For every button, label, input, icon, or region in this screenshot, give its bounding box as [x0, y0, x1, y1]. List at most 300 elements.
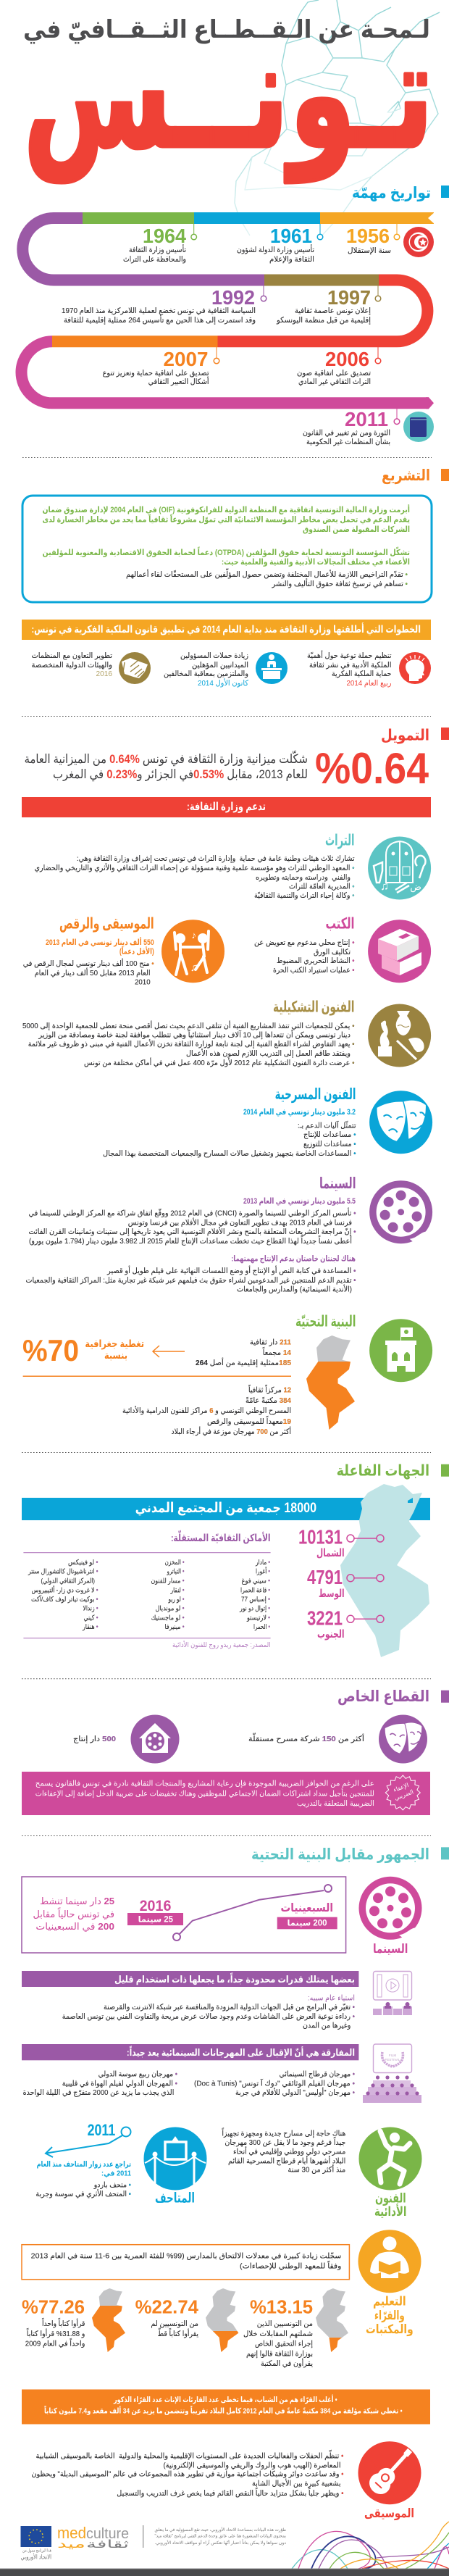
stat: read a book: واحداً في العام 2009	[25, 2338, 85, 2348]
label: المتاحف	[155, 2191, 195, 2206]
icon: festival laurel and audience	[363, 2044, 421, 2103]
region count: north: 10131	[298, 1526, 343, 1548]
icon: books	[368, 920, 431, 983]
region count: south: الجنوب	[317, 1628, 345, 1641]
venues column 1	[239, 1559, 270, 1631]
icon: heritage: ض	[410, 881, 421, 893]
timeline event 2006: 2006	[325, 348, 369, 370]
coverage label	[85, 1338, 144, 1361]
icon: museum frame and ropes	[143, 2127, 207, 2190]
venues column 2: • المخزن	[165, 1559, 184, 1567]
panel: infrastructure	[22, 1314, 432, 1436]
panel: heritage	[35, 833, 431, 900]
timeline event 1956: سنة الإستقلال	[348, 246, 391, 255]
timeline event 2007: 2007	[164, 348, 209, 370]
icon: guitar	[358, 2441, 421, 2504]
map of Tunisia: coverage	[306, 1335, 355, 1430]
committees list: • المساعدة في كتابة النص أو الإنتاج أو وضع اللمسات النهائية على فيلم طويل أو قصير	[106, 1265, 356, 1275]
timeline event 1997: إقليمية من قبل منظمة اليونسكو	[276, 316, 371, 325]
label: الفنون	[375, 2191, 406, 2206]
footer	[0, 2522, 449, 2576]
stat: read a book: قرأوا كتاباً واحداً	[42, 2318, 85, 2328]
heading: البنية التحتيّة	[295, 1314, 356, 1330]
venues column 1: • الحمرا	[253, 1623, 270, 1631]
committees list	[26, 1265, 356, 1294]
theatre need text: مسرحي دولي ووطني وإقليمي في أنحاء	[233, 2146, 345, 2156]
EU funding note: الاتحاد الأوروبي	[20, 2554, 51, 2561]
music text: العام 2013 مقابل 50 ألف دينار في العام	[35, 967, 151, 978]
enrolment box	[22, 2245, 349, 2280]
label: والمكتبات	[366, 2322, 414, 2337]
step: field officers: الميدانيين المؤهلين	[192, 661, 248, 670]
theatre need text: البلاد أشهرها أيام قرطاج المسرحية القائم	[228, 2155, 345, 2165]
banner	[22, 1971, 358, 1987]
timeline event 1964	[123, 224, 197, 264]
panel: museums	[35, 2121, 207, 2206]
OIF agreement text: أبرمت وزارة المالية التونسية اتفاقية مع المنظمة الدولية للفرانكوفونية (OIF) في العام 2004 لإدارة صندوق ضمان	[42, 504, 410, 514]
theatre text: • المساعدات الخاصة بتجهيز وتشغيل صالات المسارح والجمعيات المتخصصة بهذا المجال	[103, 1149, 356, 1158]
tax exemption badge: الضريبي	[393, 1788, 414, 1801]
amount: 3.2 مليون دينار تونسي في العام 2014	[243, 1108, 356, 1117]
venues column 2: • مينيرفا	[165, 1623, 184, 1631]
cinema text	[29, 1208, 356, 1246]
enrolment box: سجّلت زيادة كبيرة في معدلات الالتحاق بالمدارس (99% للفئة العمرية بين 6-11 سنة في العام 2013	[31, 2252, 341, 2261]
venues column 1: • أغورا	[256, 1567, 270, 1576]
visitors drop stat	[46, 2121, 130, 2157]
med culture logo: ميد	[57, 2538, 85, 2551]
venues column 3: • زندالا	[83, 1605, 98, 1613]
venues column 2: • لو ماجستيك	[151, 1614, 185, 1622]
icon: Tunisian flag	[403, 227, 434, 257]
visual arts text: دينار تونسي ويمكن أن تتعداها إلى 10 آلاف دينار استثنائياً وهي تتطلب موافقة لجنة خاصة ومصادقة من الوزير	[38, 1029, 351, 1040]
stat: library readers: بوزارة الثقافة قالوا إنهم	[246, 2350, 313, 2359]
timeline event 1992: السياسة الثقافية في تونس تخضع لعملية اللامركزية منذ العام 1970	[62, 307, 256, 315]
stat: never read	[135, 2288, 238, 2352]
heading: الموسيقى والرقص	[59, 916, 154, 933]
step: awareness campaign: تنظيم حملة توعية حول أهميّة	[307, 650, 392, 660]
music text: 2010	[135, 978, 151, 987]
disclaimer: بمحتوى البيانات المنشورة هنا على عاتق وحدة الدعم الفني لبرنامج "ثقافة ميد"	[155, 2534, 286, 2539]
banner: readers and libraries: • أغلب القرّاء هم من الشباب، فيما تخطى عدد القارئات الإناث عدد القرّاء الذكور	[113, 2394, 337, 2404]
tax text: على الرغم من الحوافز الضريبية الموجودة فإن رعاية المشاريع والمنتجات الثقافية نادرة في تونس فالقانون يسمح	[35, 1779, 374, 1788]
bottom bar	[0, 2569, 449, 2576]
coverage label: تغطية جغرافية	[85, 1338, 144, 1350]
background map outline of Tunisia	[235, 0, 440, 239]
infrastructure counts north: 185ممثلية إقليمية من أصل 264	[196, 1357, 291, 1367]
timeline event 1961	[237, 224, 323, 264]
theatre need text	[222, 2127, 345, 2175]
timeline event 2006: تصديق على اتفاقية صون	[297, 369, 371, 378]
music scene text: المعاصرة (الهيب هوب والروك والريفي والموسيقى الإلكترونية)	[164, 2461, 340, 2469]
timeline event 1964: والمحافظة على التراث	[123, 255, 186, 264]
heading: private sector: القطاع الخاص	[337, 1688, 429, 1705]
music funding amount	[46, 937, 154, 956]
step: awareness campaign: حماية الملكية الفكرية	[332, 670, 391, 678]
panel: film festivals	[22, 2044, 421, 2103]
venues column 3: • كيني	[84, 1614, 98, 1622]
coverage label: بنسبة	[104, 1349, 127, 1361]
music scene text: بشعبية كبيرة بين الأجيال الشابة	[252, 2479, 340, 2488]
visitors text: تراجع عدد زوار المتاحف منذ العام	[37, 2160, 131, 2169]
festival list right	[194, 2070, 355, 2097]
venues column 1: • إسباس 77	[241, 1596, 270, 1604]
enrolment box: وفقاً للمعهد الوطني للإحصاءات)	[240, 2260, 341, 2271]
stat: library readers: يقرأون في المكتبة	[261, 2358, 313, 2368]
icon: heritage: ♫	[380, 880, 389, 893]
heritage text: • المعهد الوطني للتراث وهو مؤسسة علمية وفنية مسؤولة عن إحصاء التراث الثقافي والأثري والتاريخي والحضاري	[35, 863, 355, 872]
timeline event 1956: 1956	[346, 225, 390, 247]
stat: read a book	[22, 2288, 125, 2352]
visual arts text: • عرضت دائرة الفنون التشكيلية عام 2012 لأول مرّة 400 عمل فني في أماكن مختلفة من تونس	[84, 1057, 355, 1067]
heading: الأماكن الثقافيّة المستقلّة:	[171, 1530, 271, 1544]
music scene text: • تنظّم الحفلات والفعاليات الجديدة على المستويات الإقليمية والمحلية والدولية الخاصة بالموسيقى الشبابية	[36, 2450, 344, 2460]
timeline event 1992: 1992	[211, 286, 255, 309]
OTPDA bullets: • تساهم في ترسيخ ثقافة حقوق التأليف والنشر	[272, 578, 408, 588]
step: field officers	[164, 651, 288, 688]
banner	[22, 2044, 358, 2060]
med culture logo	[57, 2524, 129, 2551]
OTPDA text: الأعضاء في مختلف المجالات الأدبية والفنية والعلمية حيث:	[222, 557, 410, 567]
funding comparison text	[25, 750, 308, 782]
region count: north: الشمال	[316, 1547, 345, 1559]
med culture logo: med	[57, 2524, 86, 2542]
discontent text: استياء عام سببه:	[308, 1994, 355, 2003]
causes list: • تغيّر في البرامج من قبل الجهات الدولية المزودة والمنافسة عبر شبكة الانترنت والقرصنة	[104, 2003, 355, 2012]
data point seventies	[277, 1902, 337, 1929]
step: awareness campaign: الملكية الأدبية في نشر ثقافة	[309, 660, 391, 670]
timeline event 1992	[62, 285, 267, 325]
timeline event 1992: وقد استمرت إلى هذا الحين مع تأسيس 264 ممثلية إقليمية للثقافة	[64, 314, 256, 325]
label: الموسيقى	[364, 2506, 414, 2521]
venues column 3: • لا غروت دي زار- ألتيبيروس	[32, 1585, 98, 1594]
venues column 3: • هنقار	[82, 1623, 98, 1631]
panel: music and dance	[23, 916, 224, 987]
icon: dancers: ♪	[191, 930, 196, 941]
icon: law book	[403, 412, 434, 442]
colourful swirl	[292, 2522, 449, 2569]
OTPDA text: تشكّل المؤسسة التونسية لحماية حقوق المؤلفين (OTPDA) دعماً لحماية الحقوق الاقتصادية والمعنوية للمؤلفين	[42, 546, 410, 557]
OTPDA text	[42, 546, 410, 567]
icon: cultural building	[369, 1319, 432, 1382]
infrastructure counts all	[122, 1384, 291, 1436]
heritage text: تشارك ثلاث هيئات وطنية عامة في حماية وإدارة التراث في تونس تحت إشراف وزارة الثقافة وهي:	[77, 854, 355, 863]
icon: cinema reel with label: السينما	[373, 1942, 408, 1956]
venues column 3	[28, 1559, 98, 1631]
heading: التراث	[325, 833, 355, 849]
EU funding note: هذا البرنامج ممول من	[22, 2548, 51, 2554]
cinema text: فرنسا في العام 2013 بهدف تطوير التعاون في مجال الأفلام بين فرنسا وتونس	[128, 1218, 352, 1227]
banner: civil society associations	[22, 1498, 430, 1520]
visual arts text: ويفتقد طاقم العمل إلى التدريب اللازم لصون هذه الأعمال	[186, 1049, 351, 1058]
label: الأدائية	[374, 2204, 407, 2219]
cinema text: أعطى نفساً جديداً لهذا القطاع حيث تخطت مساعدات الإنتاج للعام 2015 الـ 3.982 مليون دينار (1.794 مليون يورو)	[29, 1235, 352, 1246]
stat: library readers	[243, 2288, 348, 2368]
region count: centre: الوسط	[319, 1588, 345, 1600]
icon: cinema reel with label	[359, 1877, 421, 1956]
OTPDA bullets: • تقدّم التراخيص اللازمة للأعمال المختلفة وتضمن حصول المؤلّفين على المستحقّات لقاء أعمالهم	[126, 569, 408, 579]
timeline road	[22, 212, 435, 409]
funding comparison text: للعام 2013، مقابل %0.53في الجزائر و%0.23 في المغرب	[53, 767, 308, 782]
stat: library readers: من التونسيين الذين	[257, 2319, 313, 2328]
banner: intellectual property steps	[22, 620, 431, 640]
icon: screen and seats	[373, 1971, 412, 2015]
OTPDA bullets	[126, 569, 408, 588]
stat: never read: يقرأوا كتاباً قطّ	[158, 2328, 198, 2338]
venues column 2: • لو مونديال	[155, 1605, 184, 1613]
cinema text: • تأسس المركز الوطني للسينما والصورة (CNCI) في العام 2012 ووقّع اتفاق شراكة مع المركز الوطني للسينما في	[29, 1208, 356, 1218]
heading: الفنون التشكيلية	[273, 999, 355, 1016]
visual arts text: • يعهد التفاوض لشراء القطع الفنية إلى لجنة تابعة لوزارة الثقافة تخزن الأعمال الفنية في مبنى ذو ظروف غير ملائمة	[28, 1039, 355, 1049]
map: associations by region	[298, 1484, 429, 1657]
timeline event 2011: بشأن المنظمات غير الحكومية	[306, 436, 390, 446]
region count: centre	[307, 1566, 384, 1600]
timeline event 1964: تأسيس وزارة الثقافة	[129, 244, 186, 254]
theatre text: • مساعدات للتوزيع	[303, 1140, 356, 1149]
data point 2016: 2016	[140, 1898, 171, 1914]
infrastructure counts all: أكثر من 700 مهرجان موزعة في أرجاء البلاد	[171, 1426, 291, 1436]
venues column 2: • لو ريو	[168, 1596, 185, 1604]
banner: readers and libraries: • تغطي شبكة مؤلفة من 384 مكتبةً عامةً في العام 2012 كامل البلاد تقريباً وتتضمن ما يزيد عن 34 ألف مقعد و7.4 مليون كتاباً	[44, 2405, 403, 2416]
icon: theatre masks	[369, 1091, 432, 1154]
disclaimer	[155, 2527, 286, 2546]
museums list: • متحف باردو	[93, 2180, 131, 2189]
heading: important dates: تواريخ مهمّة	[352, 185, 431, 201]
data point seventies: 200 سينما	[287, 1920, 327, 1928]
funding comparison text: شكّلت ميزانية وزارة الثقافة في تونس %0.64 من الميزانية العامة	[25, 750, 308, 767]
cinema decline text	[33, 1896, 114, 1932]
panel: performing arts funding	[103, 1086, 432, 1158]
banner: المفارقة هي أنّ الإقبال على المهرجانات السينمائية يعد جيداً:	[127, 2046, 355, 2058]
causes list	[62, 2003, 355, 2030]
heading: funding: التمويل	[381, 728, 429, 744]
heading: السينما	[319, 1175, 356, 1192]
panel: independent cultural venues	[23, 1530, 271, 1649]
festival list right: • مهرجان قرطاج السينمائي	[280, 2070, 355, 2079]
venues column 2: • لنقار	[170, 1586, 184, 1594]
festival list right: • مهرجان الفيلم الوثائقي "دوك آ تونس" (Doc à Tunis)	[194, 2078, 355, 2088]
med culture logo: ثقافة	[86, 2538, 129, 2551]
label	[374, 2191, 407, 2219]
banner: ministry supports: تدعم وزارة الثقافة:	[187, 801, 266, 813]
OIF agreement text: الشركات المقبولة ضمن الصندوق	[303, 525, 410, 534]
icon: festival laurel and audience: FILM	[389, 2054, 396, 2057]
heritage text: • وكالة إحياء التراث والتنمية الثقافيّة	[254, 891, 355, 900]
heritage text: • المديرية العامّة للتراث	[289, 883, 355, 891]
visitors drop stat: 2011	[88, 2121, 115, 2139]
theatre need text: هناك حاجة إلى مسارح جديدة ومجهزة تجهيزاً	[222, 2127, 345, 2138]
heading: actors: الجهات الفاعلة	[337, 1463, 429, 1480]
icon: festival laurel and audience: FESTIVAL	[385, 2058, 400, 2062]
panel: legislation box	[22, 496, 432, 602]
theatre need text: منذ أكثر من 30 سنة	[288, 2164, 345, 2175]
books text: • النشاط التحريري المضبوط	[277, 956, 355, 965]
venues column 3: (المركز الثقافي الدولي)	[41, 1577, 95, 1585]
data point 2016	[127, 1898, 183, 1925]
banner: civil society associations: 18000 جمعية من المجتمع المدني	[135, 1501, 316, 1516]
big stat: 0.64 percent: %0.64	[315, 744, 429, 793]
step: awareness campaign	[307, 650, 431, 688]
venues column 1: • قاعة الحمرا	[240, 1586, 270, 1594]
cinema text: • إنّ مراجعة التشريعات المتعلقة بالمنح ونشر الأفلام التونسية التي يعود تاريخها إلى ستينات وثمانينات القرن الفائت	[29, 1227, 356, 1236]
icon: dancer	[359, 2127, 421, 2190]
panel: limited capacity	[22, 1971, 412, 2030]
music text	[23, 958, 154, 987]
venues column 1: • لارتيستو	[246, 1614, 270, 1622]
icon: film reel	[369, 1180, 432, 1243]
music scene text	[31, 2450, 344, 2498]
museums list: • المتحف الأثري في سوسة وجربة	[35, 2189, 131, 2198]
venues column 3: • بوكيت تياتر لوف كاف/آكت	[31, 1594, 98, 1604]
panel: music	[31, 2441, 421, 2521]
timeline event 1997: إعلان تونس عاصمة ثقافية	[295, 307, 371, 315]
stat: library readers: %13.15	[250, 2296, 313, 2318]
timeline event 2007	[103, 347, 219, 386]
timeline event 2007: تصديق على اتفاقية حماية وتعزيز تنوع	[103, 369, 209, 378]
timeline event 2011	[303, 408, 400, 446]
timeline event 2007: أشكال التعبير الثقافي	[148, 376, 209, 386]
amount: 5.5 مليون دينار تونسي في العام 2013	[243, 1197, 356, 1206]
panel: books	[254, 916, 431, 983]
private sector: production houses: 500 دار إنتاج	[73, 1735, 116, 1743]
label: والقرّاء	[374, 2309, 405, 2323]
stat: library readers: شملتهم المقابلات خلال	[243, 2330, 313, 2338]
icon: reader	[358, 2230, 421, 2293]
venues column 3: • لو فينيكس	[68, 1559, 98, 1567]
step: field officers: والملتزمين بمعاقبة المخالفين	[164, 670, 248, 678]
icon: vase statue palette	[368, 1004, 431, 1067]
private sector: production houses	[73, 1714, 180, 1764]
causes list: • رداءة نوعية العرض على الشاشات وعدم وجود صالات عرض مريحة والتفاوت الفني بين تونس العاصمة	[62, 2012, 355, 2021]
festival list left	[23, 2070, 177, 2097]
banner: ministry supports	[22, 797, 431, 817]
timeline event 1961: تأسيس وزارة الدولة لشؤون	[237, 244, 314, 254]
OIF agreement text	[42, 504, 410, 534]
books text: • إنتاج محلي مدعوم مع تعويض عن	[254, 938, 355, 947]
timeline event 2006: التراث الثقافي غير المادي	[298, 378, 371, 386]
cinema decline text: 25 دار سينما تنشط	[40, 1896, 114, 1907]
panel: visual arts	[22, 999, 431, 1067]
festival list right: • مهرجان "أوليس" الدولي للأفلام في جربة	[235, 2087, 355, 2097]
heading: legislation: التشريع	[382, 467, 430, 484]
stat: read a book: %77.26	[22, 2296, 85, 2318]
stat: read a book: و 31.88% قرأوا كتاباً	[27, 2328, 85, 2338]
music scene text: • ويظهر جلياً بشكل متزايد حالياً النقص القائم فيما يخص غرف التدريب والتسجيل	[117, 2488, 344, 2498]
timeline event 1961: الثقافة والإعلام	[269, 255, 314, 264]
region count: north	[298, 1526, 384, 1559]
infrastructure counts north: 211 دار ثقافية	[250, 1338, 291, 1347]
visual arts text: • يمكن للجمعيات التي تنفذ المشاريع الفنية أن تتلقى الدعم بحيث تصل أقصى منحة تعطى للجمعية الواحدة إلى 5000	[22, 1020, 355, 1030]
heading: الكتب	[326, 916, 355, 933]
data point seventies: السبعينيات	[281, 1902, 333, 1914]
step: international cooperation: 2016	[96, 670, 112, 678]
cinema decline text: 200 في السبعينيات	[35, 1921, 114, 1932]
timeline event 1964: 1964	[143, 225, 186, 247]
step: field officers: كانون الأول 2014	[198, 678, 248, 688]
heritage text: والفني ودراسته وحمايته وتطويره	[256, 873, 351, 882]
venues column 2: • مسار للفنون	[151, 1577, 184, 1585]
music scene text: • وقد ساعدت دوائر وشبكات اجتماعية موازية في تطوير هذه المجموعات في عالم "الموسيقى البديلة" ويحظون	[31, 2470, 344, 2479]
visitors text	[37, 2160, 131, 2178]
data point 2016: 25 سينما	[138, 1916, 174, 1925]
timeline event 1997: 1997	[327, 286, 371, 309]
theatre text: • مساعدات للإنتاج	[303, 1130, 356, 1139]
books text	[254, 938, 355, 975]
med culture logo: culture	[86, 2526, 129, 2542]
icon: heritage	[368, 836, 431, 900]
cinema decline text: في تونس حالياً مقابل	[33, 1907, 114, 1920]
label	[366, 2295, 414, 2337]
timeline event 2011: 2011	[345, 408, 388, 430]
tax text: للمنتجين بتأجيل سداد اشتراكات الضمان الاجتماعي للموظفين وهناك تخفيضات على ضريبة الدخل إضافة إلى الإعفاءات	[35, 1788, 374, 1798]
private sector: theatre companies: أكثر من 150 شركة مسرح مستقلّة	[248, 1733, 364, 1743]
committees heading: هناك لجنتان خاصتان بدعم الإنتاج مهمتهما:	[232, 1255, 356, 1264]
timeline event 1961: 1961	[270, 225, 312, 247]
festival list left: الذي يجذب ما يزيد عن 2000 متفرّج في الليلة الواحدة	[23, 2088, 174, 2097]
venues column 1: • مادار	[255, 1559, 270, 1567]
panel: cinema decline chart	[22, 1877, 346, 1953]
stat: never read: من التونسيين لم	[151, 2319, 198, 2328]
infrastructure counts all: 12 مركزاً ثقافياً	[248, 1384, 291, 1395]
committees list: (الأندية السينمائية) والمدارس والجامعات	[237, 1285, 352, 1294]
timeline event 1956	[346, 224, 400, 255]
tax text	[35, 1779, 374, 1808]
label: التعليم	[373, 2295, 406, 2309]
banner: بعضها يمتلك قدرات محدودة جداً، ما يجعلها ذات استخدام قليل	[114, 1972, 355, 1985]
step: awareness campaign: ربيع العام 2014	[346, 679, 391, 688]
music funding amount: (الأقل دعماً)	[119, 945, 154, 956]
step: international cooperation: تطوير التعاون مع المنظمات	[32, 651, 112, 660]
panel: performing arts	[222, 2127, 421, 2219]
theatre text	[103, 1121, 356, 1158]
disclaimer: طوّرت هذه البيانات بمساعدة الاتحاد الأوروبي، حيث تقع المسؤولية في ما يتعلق	[155, 2527, 286, 2533]
venues column 3: • انترناشيونال كالتشورال سنتر	[28, 1568, 98, 1576]
causes list: وغيرها من المدن	[303, 2022, 351, 2030]
infrastructure counts north: 14 مجمعاً	[262, 1347, 291, 1357]
panel: education and reading	[22, 2230, 421, 2368]
venues column 1: • إتوال دو نور	[239, 1605, 270, 1613]
timeline event 1997	[276, 285, 381, 325]
timeline event 2011: الثورة ومن ثم تغيير في القانون	[303, 429, 390, 438]
region count: south: 3221	[307, 1607, 343, 1630]
heading: الفنون المسرحية	[275, 1086, 356, 1103]
step: international cooperation: والهيئات الدولية المتخصصة	[32, 661, 112, 670]
committees list: • تقديم الدعم للمنتجين غير المدعومين لشراء حقوق بث فيلمهم عبر شبكة غير تجارية مثل: المراكز الثقافية والجمعيات	[26, 1276, 356, 1285]
venues column 2	[151, 1559, 185, 1631]
museums list	[35, 2180, 131, 2198]
panel: cinema funding	[26, 1175, 432, 1294]
timeline event 2006	[297, 347, 381, 386]
music text: • منح 100 ألف دينار تونسي لمجال الرقص في	[23, 958, 154, 968]
infrastructure counts all: 384 مكتبةً عامّةً	[246, 1396, 291, 1405]
private sector: theatre companies	[248, 1714, 427, 1764]
music funding amount: 550 ألف دينار تونسي في العام 2013	[46, 937, 154, 947]
title	[23, 12, 434, 183]
infrastructure counts north	[196, 1338, 291, 1367]
step: field officers: زيادة حملات المسؤولين	[180, 651, 248, 660]
icon: dancers	[161, 920, 224, 983]
icon: dancers: ♫	[190, 962, 198, 974]
visual arts text	[22, 1020, 355, 1067]
banner: readers and libraries	[22, 2390, 430, 2425]
region count: centre: 4791	[307, 1566, 343, 1588]
region count: south	[307, 1607, 384, 1641]
disclaimer: دون سواها ولا يمكن بتاتاً اعتبار أنّها تعكس آراء أو مواقف الاتحاد الأوروبي.	[155, 2539, 286, 2546]
venues column 1: • سيني فوغ	[242, 1577, 270, 1585]
venues column 2: • التياترو	[167, 1568, 184, 1576]
step: international cooperation	[32, 651, 151, 684]
line chart	[173, 1885, 332, 1941]
banner: tax exemptions	[22, 1772, 430, 1815]
